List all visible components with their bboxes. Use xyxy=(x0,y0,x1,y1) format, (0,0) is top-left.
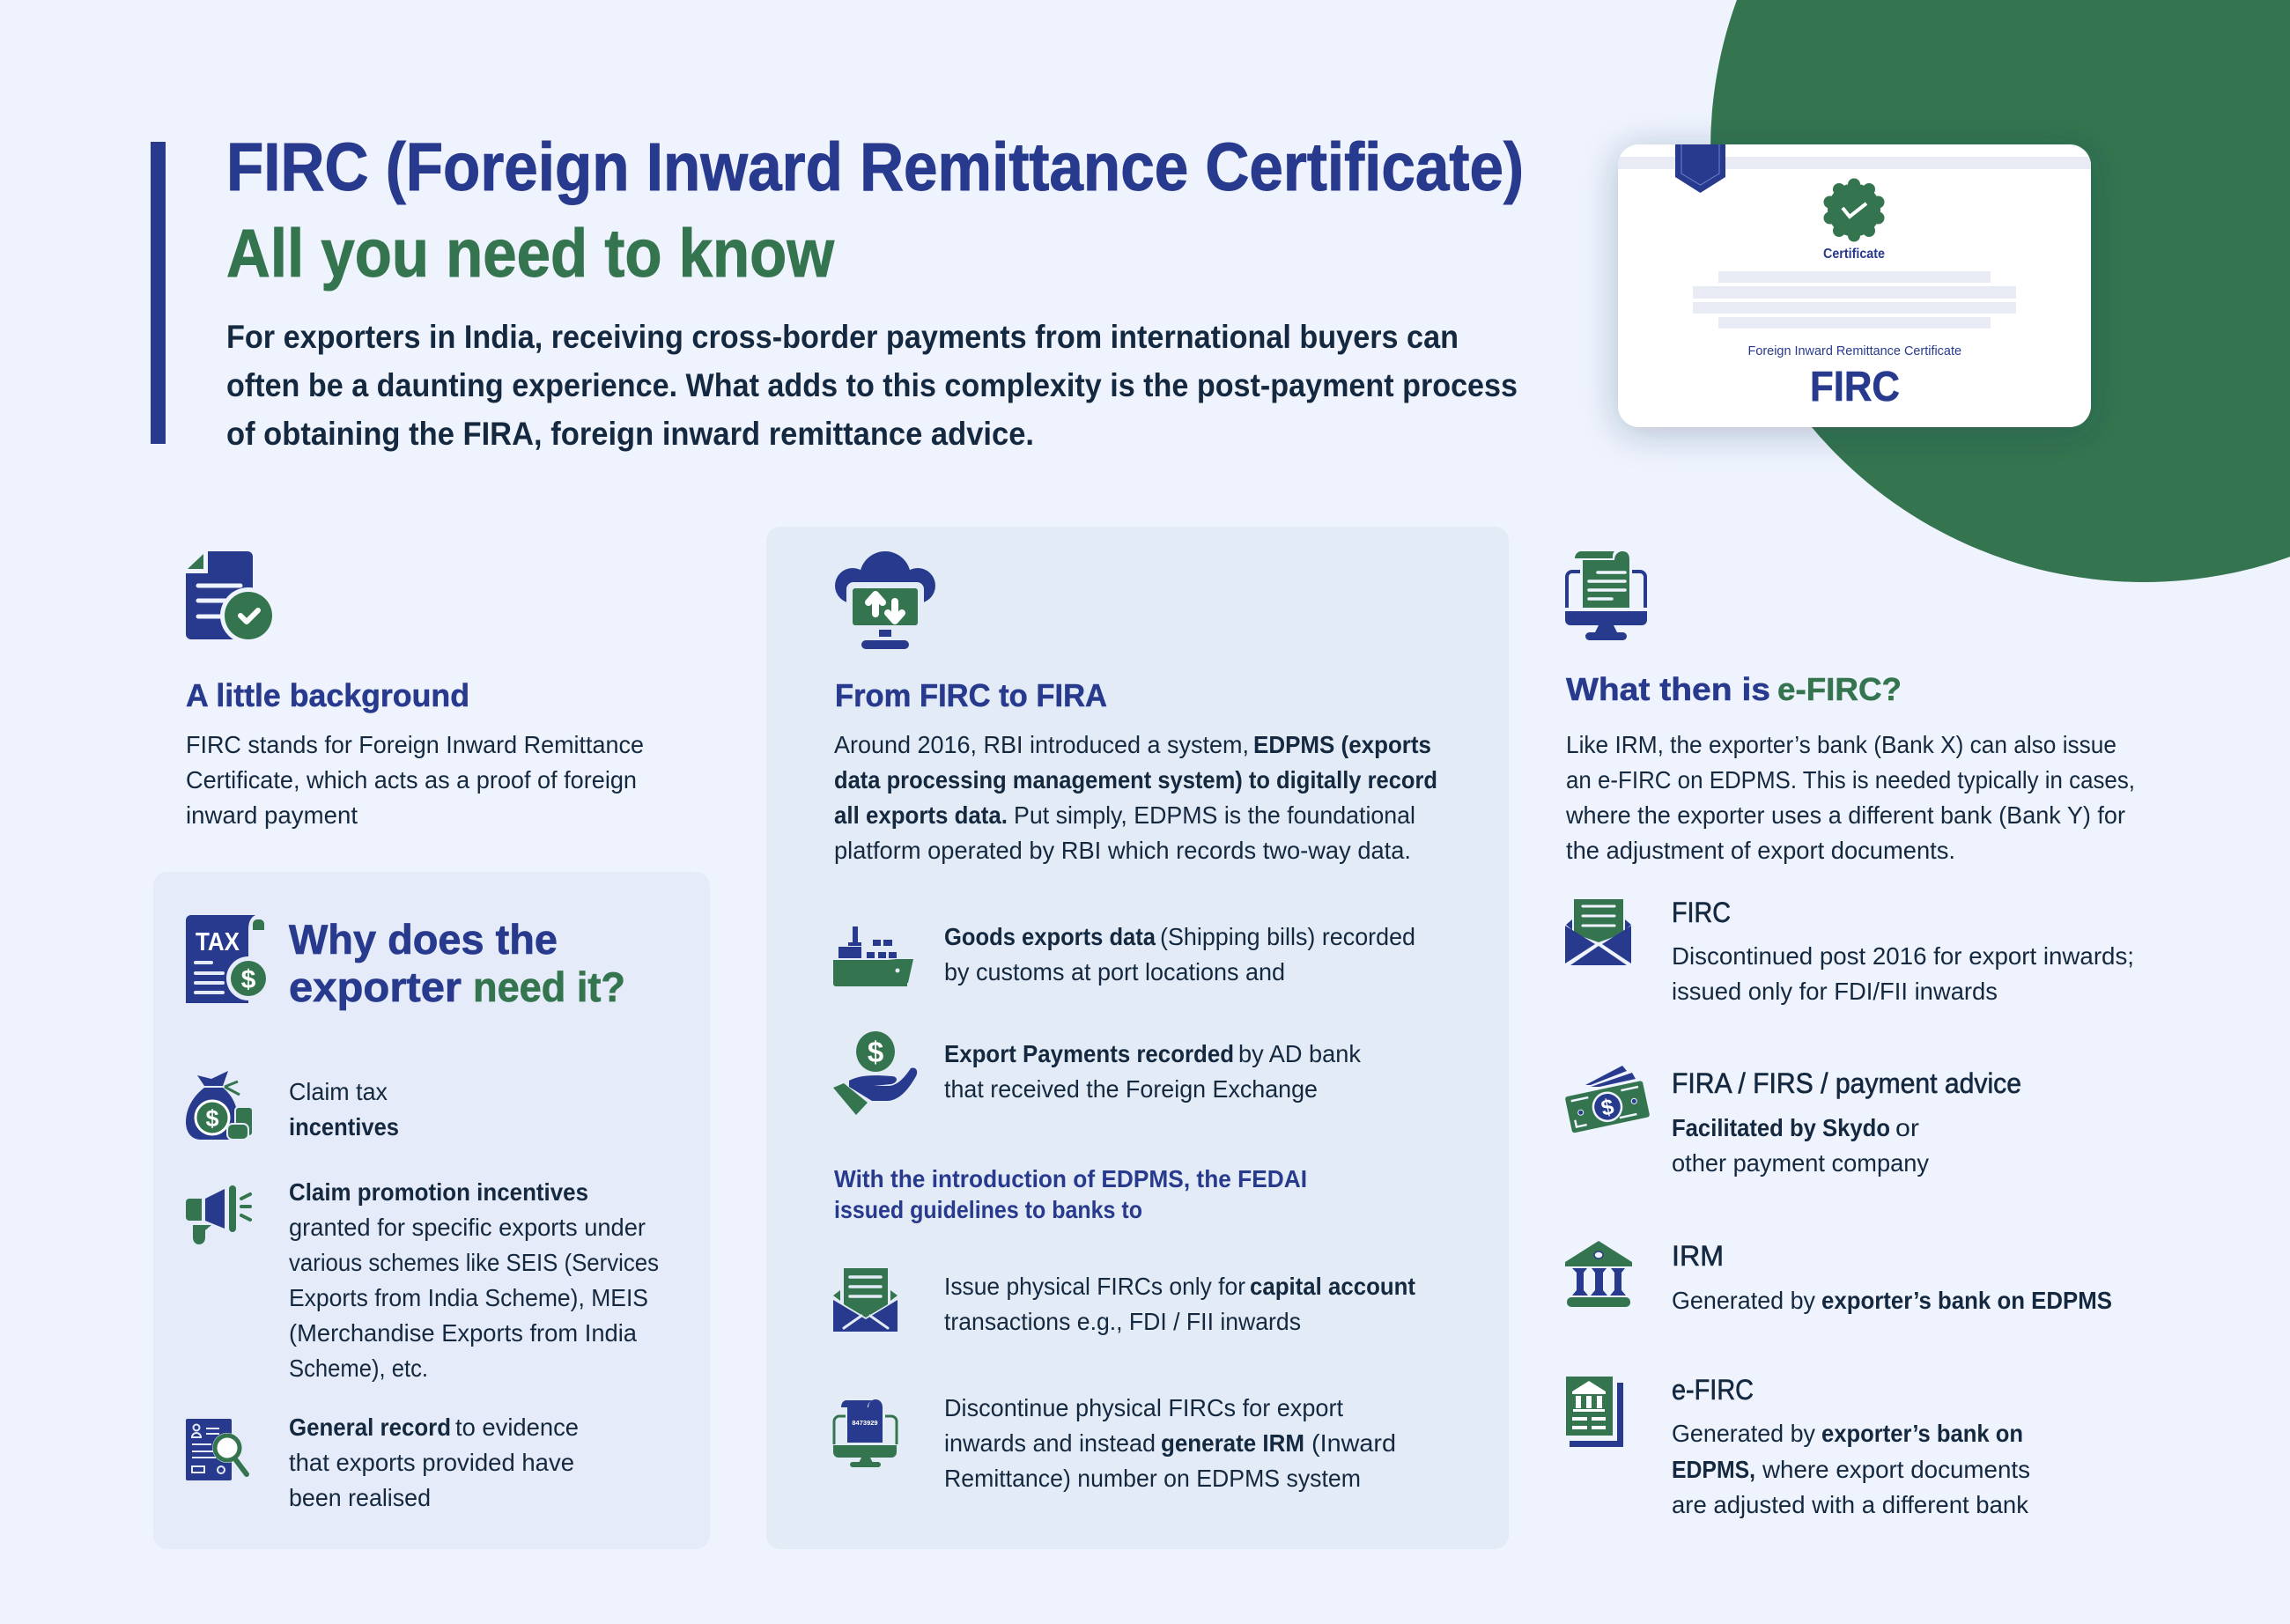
heading: From FIRC to FIRA xyxy=(835,677,1107,713)
item: issue physical FIRCs xyxy=(833,1268,1415,1335)
intro text: of obtaining the FIRA, foreign inward remittance advice. xyxy=(226,416,1034,452)
body text xyxy=(186,731,644,829)
item: promotion incentives: granted for specific exports under xyxy=(289,1214,646,1241)
item: goods exports data: by customs at port locations and xyxy=(944,958,1285,985)
item: general record xyxy=(186,1414,579,1511)
item: goods exports data: Goods exports data xyxy=(944,923,1156,950)
item: IRM: IRM xyxy=(1672,1240,1724,1272)
certificate full name: Foreign Inward Remittance Certificate xyxy=(1747,344,1961,358)
icon: monitor with IRM document: 8473929 xyxy=(852,1419,878,1427)
FEDAI subheading: With the introduction of EDPMS, the FEDAI xyxy=(834,1165,1307,1192)
body text: all exports data. xyxy=(834,801,1008,829)
item: FIRC xyxy=(1565,897,2134,1005)
item: promotion incentives: Scheme), etc. xyxy=(289,1355,428,1382)
item: discontinue physical FIRCs: Remittance) number on EDPMS system xyxy=(944,1465,1361,1492)
icon: money bag: $ xyxy=(205,1105,219,1132)
heading xyxy=(1566,671,1902,707)
item: e-FIRC: where export documents xyxy=(1762,1456,2030,1483)
FIRC wordmark: FIRC xyxy=(1810,364,1900,410)
FEDAI subheading xyxy=(834,1165,1307,1223)
icon: tax document: TAX xyxy=(196,928,240,956)
item: export payments: that received the Foreign Exchange xyxy=(944,1075,1318,1103)
body text xyxy=(1565,731,2135,864)
decorative green circle xyxy=(1710,0,2290,582)
intro text: For exporters in India, receiving cross-border payments from international buyers can xyxy=(226,319,1459,355)
item: IRM xyxy=(1565,1240,2112,1314)
subtitle: All you need to know xyxy=(226,216,835,292)
icon: cloud monitor xyxy=(835,551,935,649)
intro text: often be a daunting experience. What adds to this complexity is the post-payment process xyxy=(226,367,1518,403)
icon: bank document xyxy=(1566,1377,1623,1447)
item: FIRC: Discontinued post 2016 for export inwards; xyxy=(1672,942,2134,970)
heading: Why does the xyxy=(289,916,558,963)
icon: ribbon xyxy=(1675,144,1725,193)
item: issue physical FIRCs: Issue physical FIRCs only for xyxy=(944,1273,1245,1300)
body text: Around 2016, RBI introduced a system, xyxy=(834,731,1249,758)
item: FIRA / FIRS: Facilitated by Skydo xyxy=(1672,1114,1890,1141)
header block xyxy=(226,129,1524,452)
panel: what then is e-FIRC xyxy=(1565,551,2135,1518)
icon: banknotes: $ xyxy=(1599,1095,1616,1121)
body text: platform operated by RBI which records two-way data. xyxy=(834,837,1411,864)
placeholder lines xyxy=(1693,271,2016,328)
item: e-FIRC: Generated by xyxy=(1672,1420,1815,1447)
icon: verified badge xyxy=(1823,178,1885,241)
item: goods exports data: (Shipping bills) recorded xyxy=(1160,923,1415,950)
item: FIRA / FIRS xyxy=(1565,1066,2021,1177)
item: issue physical FIRCs: capital account xyxy=(1250,1273,1415,1300)
item: discontinue physical FIRCs xyxy=(833,1394,1396,1492)
body text: an e-FIRC on EDPMS. This is needed typically in cases, xyxy=(1566,766,2135,794)
item: tax incentives: Claim tax xyxy=(289,1078,388,1105)
item: issue physical FIRCs: transactions e.g., FDI / FII inwards xyxy=(944,1308,1301,1335)
item: IRM: Generated by xyxy=(1672,1287,1815,1314)
item: IRM: exporter’s bank on EDPMS xyxy=(1821,1287,2112,1314)
icon: envelope with letter xyxy=(833,1268,898,1332)
body text: inward payment xyxy=(186,801,358,829)
icon: hand holding coin: $ xyxy=(868,1036,883,1068)
item: FIRA / FIRS: or xyxy=(1895,1114,1919,1141)
item: e-FIRC: e-FIRC xyxy=(1672,1374,1754,1406)
item: general record: been realised xyxy=(289,1484,431,1511)
certificate label: Certificate xyxy=(1823,247,1885,262)
body text: Like IRM, the exporter’s bank (Bank X) can also issue xyxy=(1566,731,2116,758)
heading: A little background xyxy=(186,677,469,713)
item: FIRC: FIRC xyxy=(1672,897,1731,928)
item: export payments xyxy=(833,1031,1362,1115)
icon: monitor with IRM document xyxy=(833,1399,897,1467)
item: export payments: Export Payments recorded xyxy=(944,1040,1234,1067)
body text: EDPMS (exports xyxy=(1253,731,1431,758)
heading: What then is xyxy=(1566,671,1770,707)
item: FIRA / FIRS: other payment company xyxy=(1672,1149,1929,1177)
item: tax incentives: incentives xyxy=(289,1113,399,1140)
heading: need it? xyxy=(473,963,625,1010)
body text: where the exporter uses a different bank (Bank Y) for xyxy=(1565,801,2125,829)
item: general record: that exports provided have xyxy=(289,1449,574,1476)
title: FIRC (Foreign Inward Remittance Certificate) xyxy=(226,129,1524,205)
item: e-FIRC: are adjusted with a different bank xyxy=(1672,1491,2029,1518)
item: goods exports data xyxy=(833,923,1415,986)
item: tax incentives xyxy=(186,1071,399,1140)
certificate card xyxy=(1618,144,2091,427)
icon: document check xyxy=(186,551,277,644)
item: promotion incentives: (Merchandise Exports from India xyxy=(289,1319,637,1347)
icon: tax document: $ xyxy=(241,965,256,994)
icon: record with magnifier xyxy=(186,1419,247,1480)
icon: envelope xyxy=(1565,899,1631,965)
item: e-FIRC xyxy=(1566,1374,2030,1518)
item: discontinue physical FIRCs: inwards and instead xyxy=(944,1429,1156,1457)
item: promotion incentives: Exports from India Scheme), MEIS xyxy=(289,1284,648,1311)
body text: FIRC stands for Foreign Inward Remittance xyxy=(186,731,644,758)
icon: bank xyxy=(1565,1241,1632,1307)
body text xyxy=(834,731,1437,864)
item: promotion incentives: various schemes like SEIS (Services xyxy=(289,1249,659,1276)
heading xyxy=(289,916,625,1010)
body text: Certificate, which acts as a proof of foreign xyxy=(186,766,637,794)
item: general record: General record xyxy=(289,1414,451,1441)
panel: why does the exporter need it xyxy=(153,872,710,1549)
icon: banknotes xyxy=(1565,1066,1650,1133)
FEDAI subheading: issued guidelines to banks to xyxy=(834,1196,1142,1223)
item: FIRA / FIRS: FIRA / FIRS / payment advice xyxy=(1672,1067,2021,1099)
icon: cargo ship xyxy=(833,926,913,986)
intro text xyxy=(226,319,1518,452)
body text: data processing management system) to digitally record xyxy=(834,766,1437,794)
icon: hand holding coin xyxy=(833,1031,917,1115)
item: discontinue physical FIRCs: generate IRM xyxy=(1161,1429,1304,1457)
icon: money bag xyxy=(186,1071,253,1140)
item: promotion incentives xyxy=(186,1178,659,1382)
icon: monitor with document xyxy=(1565,551,1647,640)
body text: the adjustment of export documents. xyxy=(1566,837,1955,864)
panel: a little background xyxy=(186,551,644,829)
item: export payments: by AD bank xyxy=(1238,1040,1362,1067)
body text: Put simply, EDPMS is the foundational xyxy=(1014,801,1415,829)
item: discontinue physical FIRCs: Discontinue physical FIRCs for export xyxy=(944,1394,1343,1421)
icon: tax document xyxy=(186,915,270,1003)
heading: exporter xyxy=(289,963,462,1010)
panel: from FIRC to FIRA xyxy=(766,527,1509,1549)
icon: megaphone xyxy=(186,1185,250,1244)
item: promotion incentives: Claim promotion incentives xyxy=(289,1178,588,1206)
item: general record: to evidence xyxy=(455,1414,579,1441)
item: e-FIRC: EDPMS, xyxy=(1672,1456,1755,1483)
heading: e-FIRC? xyxy=(1777,671,1902,707)
accent bar xyxy=(151,142,166,444)
item: e-FIRC: exporter’s bank on xyxy=(1821,1420,2023,1447)
item: discontinue physical FIRCs: (Inward xyxy=(1311,1429,1396,1457)
item: FIRC: issued only for FDI/FII inwards xyxy=(1672,978,1998,1005)
